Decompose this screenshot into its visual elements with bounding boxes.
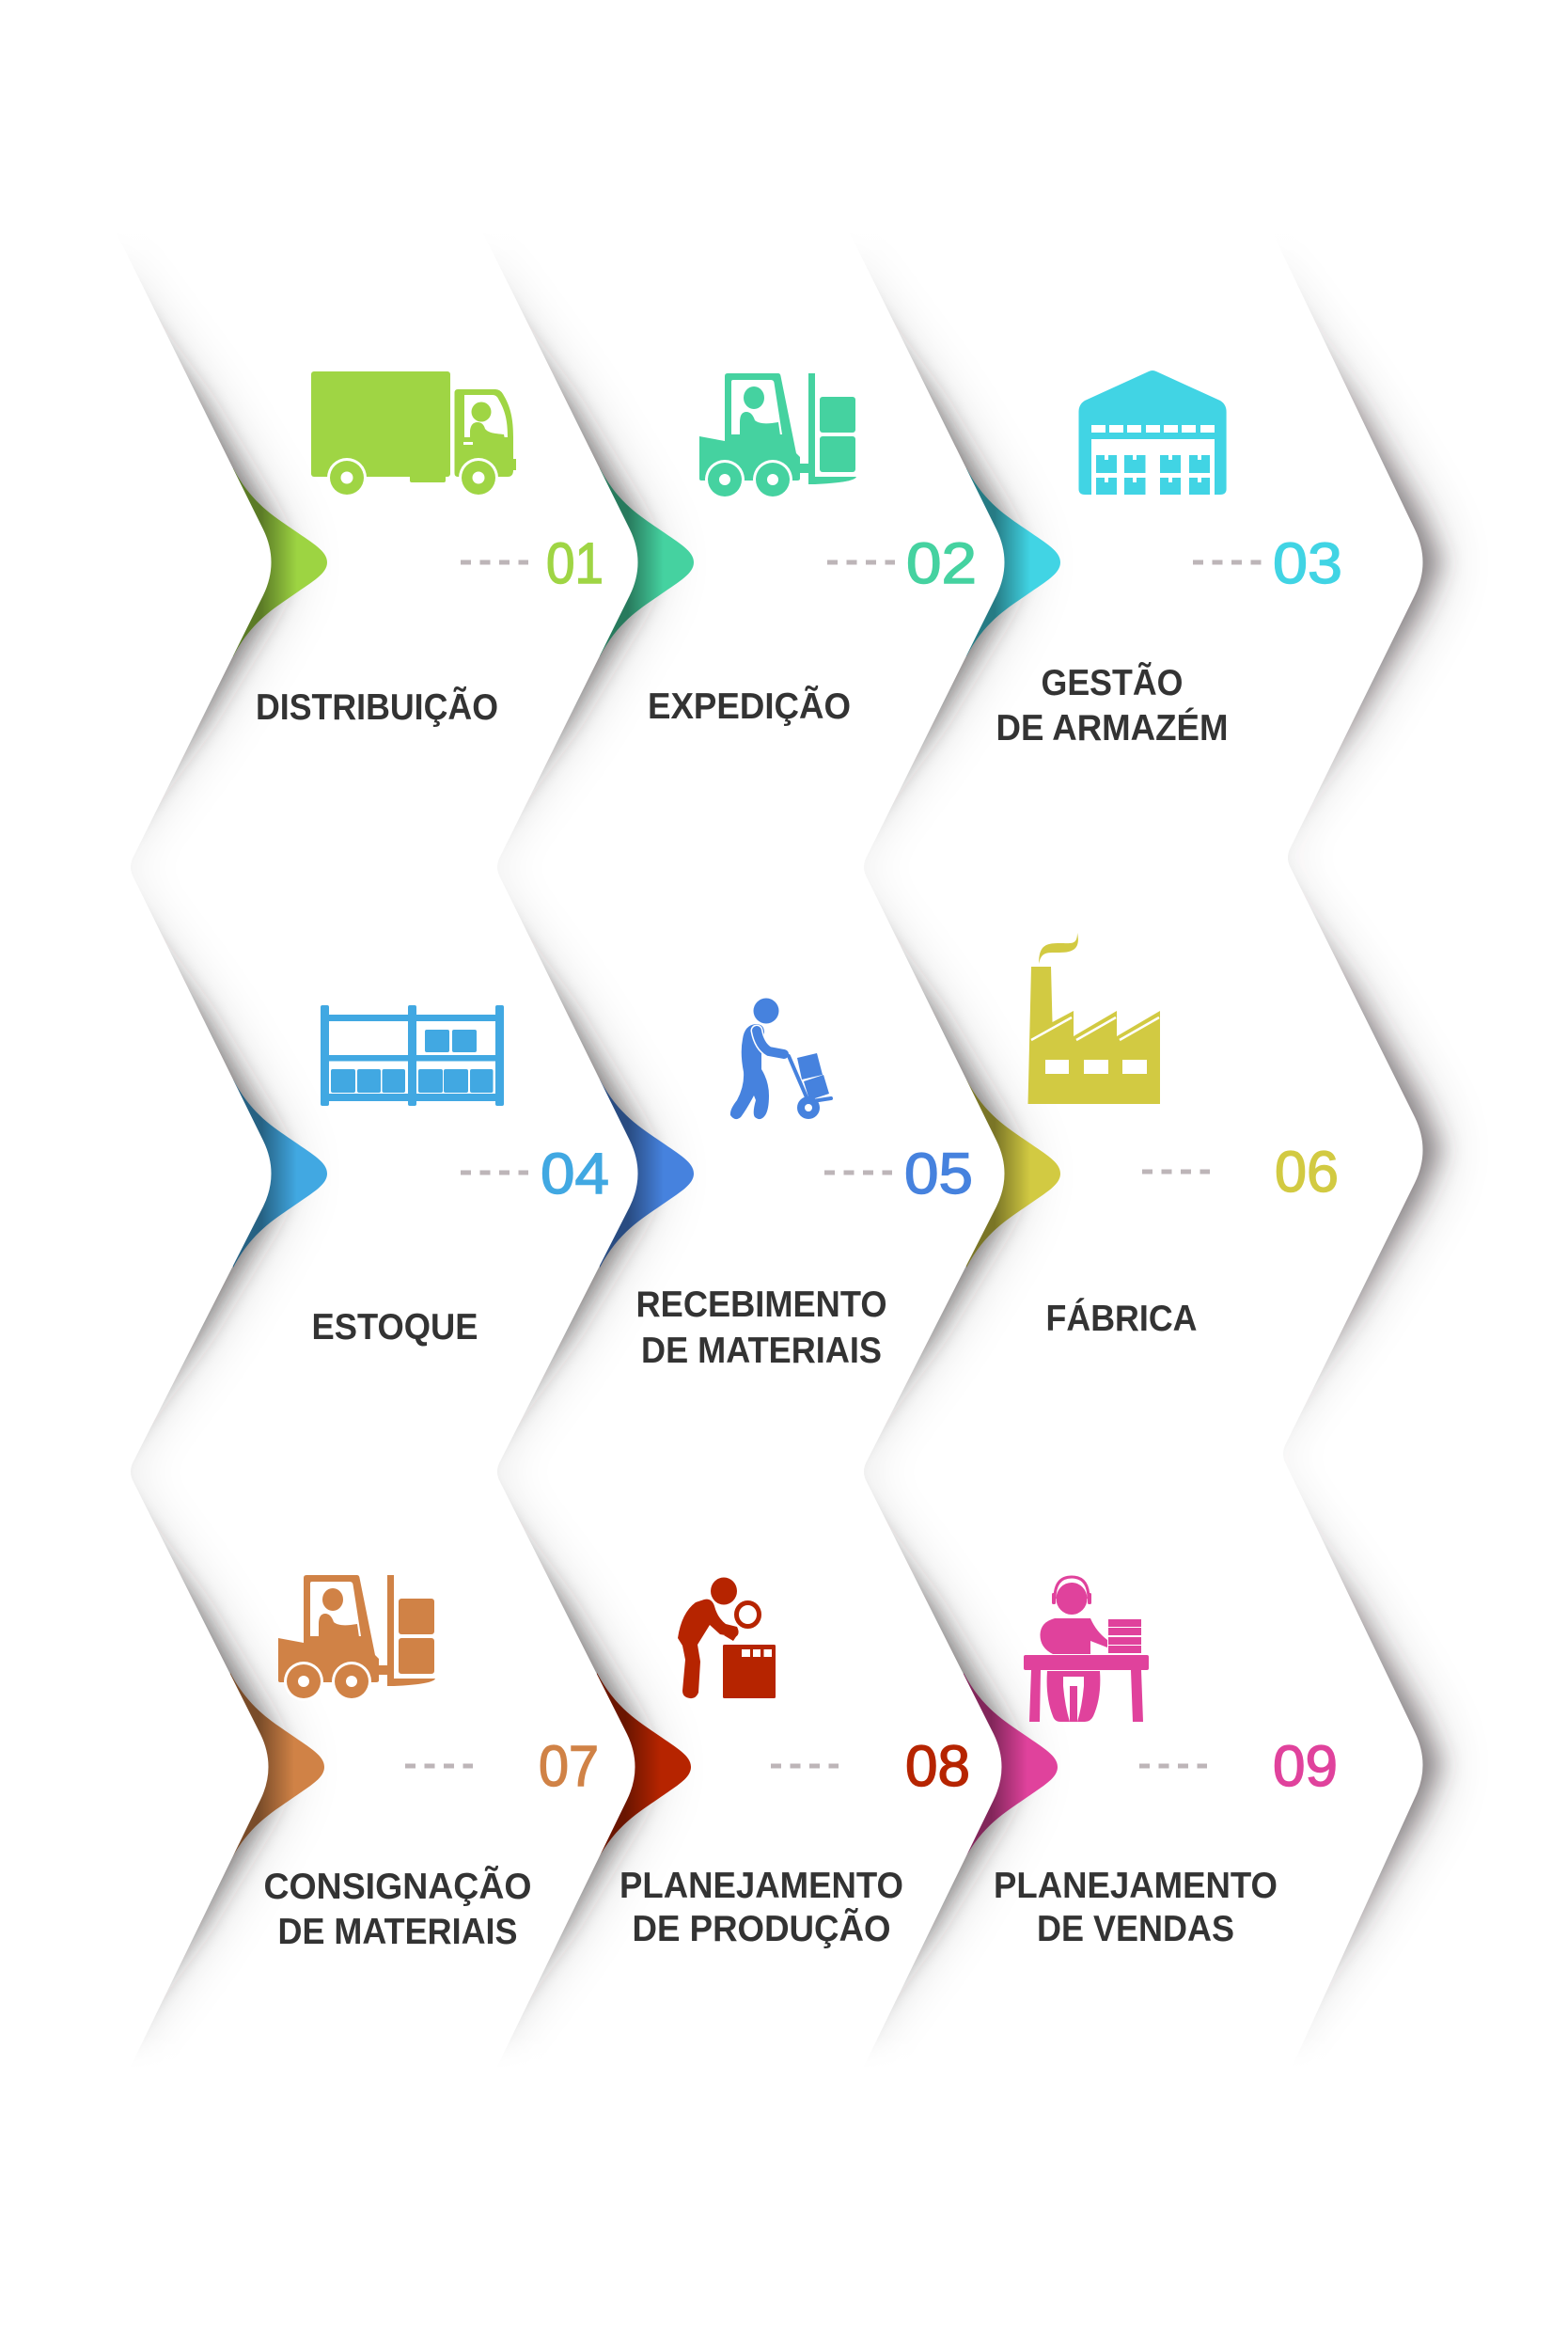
number 04: 04 (541, 1142, 609, 1206)
chevron edge 1 with shadow and ribbons 01, 04, 07 (0, 0, 327, 2333)
title: fábrica: FÁBRICA (1045, 1298, 1198, 1339)
title: expedição: EXPEDIÇÃO (648, 686, 851, 727)
panel: step 03 gestão de armazém: DE ARMAZÉM (996, 707, 1228, 749)
number 05: 05 (904, 1142, 973, 1206)
panel: step 06 fábrica (1028, 933, 1339, 1339)
panel: step 08 planejamento de produção (619, 1578, 970, 1949)
panel: step 07 consignação de materiais: DE MATERIAIS (278, 1912, 517, 1952)
number 01: 01 (546, 531, 604, 595)
panel: step 04 estoque (312, 1005, 609, 1348)
icon: inspector with magnifier and box (678, 1578, 776, 1698)
panel: step 09 planejamento de vendas: DE VENDAS (1037, 1909, 1234, 1949)
panel: step 05 recebimento de materiais: DE MATERIAIS (641, 1331, 882, 1371)
icon: shelves (321, 1005, 504, 1106)
number 08: 08 (905, 1734, 970, 1798)
icon: forklift (699, 373, 856, 499)
panel: step 05 recebimento de materiais (635, 999, 973, 1371)
panel: step 02 expedição (648, 373, 977, 727)
panel: step 01 distribuição (256, 371, 604, 728)
number 06: 06 (1275, 1140, 1339, 1204)
number 09: 09 (1273, 1734, 1338, 1798)
chevron edge 3 with shadow and ribbons 03, 06, 09 (0, 0, 1060, 2333)
title: distribuição: DISTRIBUIÇÃO (256, 686, 498, 728)
icon: factory (1028, 933, 1160, 1104)
number 07: 07 (539, 1734, 599, 1798)
icon: truck (311, 371, 516, 497)
panel: step 09 planejamento de vendas (994, 1577, 1338, 1949)
title: recebimento de materiais: RECEBIMENTO (635, 1285, 887, 1325)
title: estoque: ESTOQUE (312, 1307, 478, 1348)
icon: warehouse (1079, 370, 1227, 495)
icon: person at desk with headset (1024, 1577, 1149, 1722)
icon: person with hand truck (730, 999, 831, 1119)
title: planejamento de produção: PLANEJAMENTO (619, 1866, 903, 1906)
number 02: 02 (906, 531, 977, 595)
panel: step 07 consignação de materiais (263, 1575, 599, 1952)
panel: step 03 gestão de armazém (996, 370, 1342, 749)
number 03: 03 (1273, 531, 1342, 595)
title: planejamento de vendas: PLANEJAMENTO (994, 1866, 1278, 1906)
panel: step 08 planejamento de produção: DE PRODUÇÃO (632, 1908, 891, 1949)
icon: forklift (278, 1575, 435, 1701)
chevron edge 2 with shadow and ribbons 02, 05, 08 (0, 0, 694, 2333)
title: consignação de materiais: CONSIGNAÇÃO (263, 1866, 532, 1907)
title: gestão de armazém: GESTÃO (1042, 662, 1183, 703)
